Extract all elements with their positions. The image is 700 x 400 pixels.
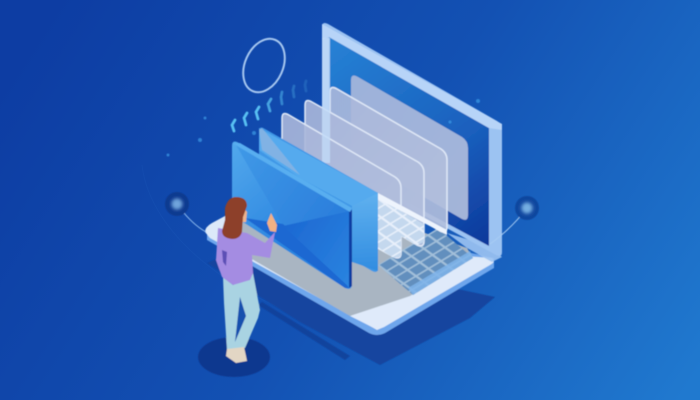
ghost page 3 <box>305 101 424 246</box>
left node <box>165 192 206 232</box>
hinge seen through pages <box>378 193 447 235</box>
hair <box>222 197 247 239</box>
shoes <box>226 347 247 363</box>
highlighted keys <box>408 251 473 295</box>
hand <box>267 213 277 232</box>
right node <box>490 196 539 244</box>
ghost page 4 <box>282 114 401 258</box>
keyboard <box>378 228 473 295</box>
person <box>216 197 277 363</box>
chevrons <box>232 81 306 131</box>
sweater <box>216 228 275 285</box>
envelope front <box>232 142 352 289</box>
gap between legs <box>235 297 246 342</box>
light palm rest <box>350 258 494 330</box>
laptop <box>205 23 502 335</box>
ghost page 1 <box>351 76 468 220</box>
sparkle dots <box>166 99 480 156</box>
scene <box>165 23 539 377</box>
face <box>242 207 247 222</box>
ghost page 2 <box>330 88 447 232</box>
gray deck <box>226 214 473 316</box>
pocket shadow <box>222 250 227 266</box>
laptop shadow <box>207 245 495 365</box>
laptop base <box>205 214 494 335</box>
translucent keyboard seen through page 3 <box>401 211 424 245</box>
frame left bar over pages <box>322 38 330 163</box>
faint orbit arc <box>142 165 330 325</box>
ring <box>235 32 293 99</box>
screen hinge <box>447 233 502 262</box>
laptop screen frame <box>322 23 502 256</box>
legs <box>223 273 260 350</box>
floor shadow <box>198 337 270 377</box>
envelope back <box>259 128 378 272</box>
translucent keyboard seen through page 4 <box>378 198 401 258</box>
